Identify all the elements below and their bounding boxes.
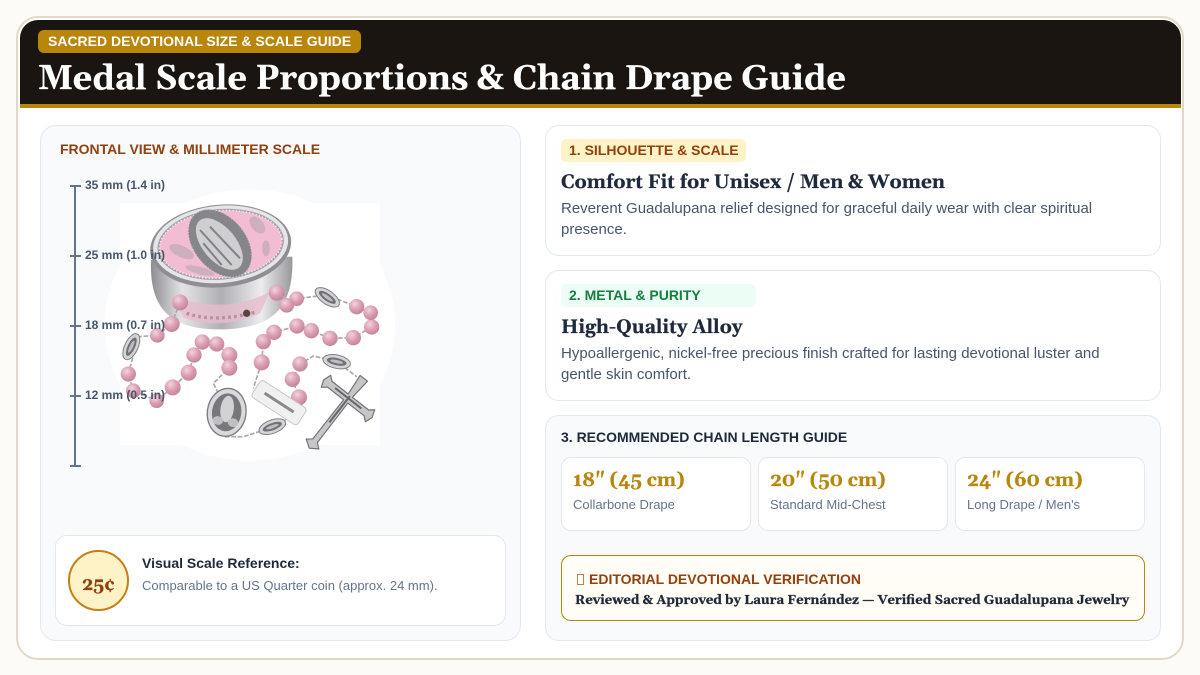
panel: chain length guide: [545, 415, 1161, 641]
illustration: rosary and keepsake box: [120, 204, 380, 450]
card title: Comfort Fit for Unisex / Men & Women: [561, 171, 945, 195]
label 25 mm: 25 mm (1.0 in): [85, 248, 165, 262]
label 18 mm: 18 mm (0.7 in): [85, 318, 165, 332]
chain option 24 inch: [955, 457, 1145, 531]
panel: visual scale reference: [55, 535, 506, 626]
tag: [251, 379, 307, 426]
figure: [175, 197, 265, 289]
title: Medal Scale Proportions & Chain Drape Guide: [38, 57, 846, 101]
lid: [147, 199, 295, 293]
badge: 1. SILHOUETTE & SCALE: [569, 142, 739, 158]
card text: Reverent Guadalupana relief designed for graceful daily wear with clear spiritual: [561, 200, 1092, 217]
badge: [561, 284, 756, 307]
card title: High-Quality Alloy: [561, 316, 742, 340]
chain option 20 inch: 20" (50 cm): [770, 469, 886, 493]
missing-glyph box: [577, 574, 584, 585]
tick 35 mm: [70, 185, 81, 187]
callout: editorial verification: [561, 555, 1145, 621]
card text: [561, 345, 1100, 383]
card text: Hypoallergenic, nickel-free precious finish crafted for lasting devotional luster and: [561, 345, 1100, 362]
medal: [204, 386, 249, 439]
panel: silhouette and scale: [545, 125, 1161, 256]
scale axis: [74, 185, 76, 467]
tick 12 mm: [70, 395, 81, 397]
chain guide heading: 3. RECOMMENDED CHAIN LENGTH GUIDE: [561, 429, 847, 445]
icon: quarter coin: [68, 550, 129, 611]
panel: frontal view and scale: [40, 125, 521, 641]
chain option 24 inch: Long Drape / Men's: [967, 497, 1080, 512]
small ovals: [119, 331, 143, 362]
tick base: [70, 465, 81, 467]
millimeter scale: [74, 187, 76, 465]
lid sparkle: [167, 213, 270, 278]
chain option 18 inch: 18" (45 cm): [573, 469, 685, 493]
verification text: Reviewed & Approved by Laura Fernández — Verified Sacred Guadalupana Jewelry: [575, 593, 1129, 609]
box body: [151, 257, 292, 329]
label 12 mm: 12 mm (0.5 in): [85, 388, 165, 402]
card text: [561, 200, 1092, 238]
chain option 24 inch: 24" (60 cm): [967, 469, 1083, 493]
header pill: [38, 30, 361, 53]
tick 18 mm: [70, 325, 81, 327]
card text: gentle skin comfort.: [561, 366, 691, 383]
reference text: Comparable to a US Quarter coin (approx. 24 mm).: [142, 578, 438, 593]
card text: presence.: [561, 221, 627, 238]
chain option 20 inch: Standard Mid-Chest: [770, 497, 886, 512]
chain option 18 inch: [561, 457, 751, 531]
chain: [128, 293, 372, 437]
panel: metal and purity: [545, 270, 1161, 401]
badge: [561, 139, 746, 162]
tick 25 mm: [70, 255, 81, 257]
beads: [121, 285, 379, 408]
header pill: SACRED DEVOTIONAL SIZE & SCALE GUIDE: [48, 33, 351, 49]
crucifix: [285, 359, 388, 467]
icon: quarter coin: 25¢: [82, 574, 115, 597]
chain option 18 inch: Collarbone Drape: [573, 497, 675, 512]
header band: [20, 20, 1181, 108]
left panel heading: FRONTAL VIEW & MILLIMETER SCALE: [60, 141, 320, 157]
reference heading: Visual Scale Reference:: [142, 555, 300, 571]
badge: 2. METAL & PURITY: [569, 287, 701, 303]
chain option 20 inch: [758, 457, 948, 531]
label 35 mm: 35 mm (1.4 in): [85, 178, 165, 192]
verification heading: EDITORIAL DEVOTIONAL VERIFICATION: [589, 571, 861, 587]
